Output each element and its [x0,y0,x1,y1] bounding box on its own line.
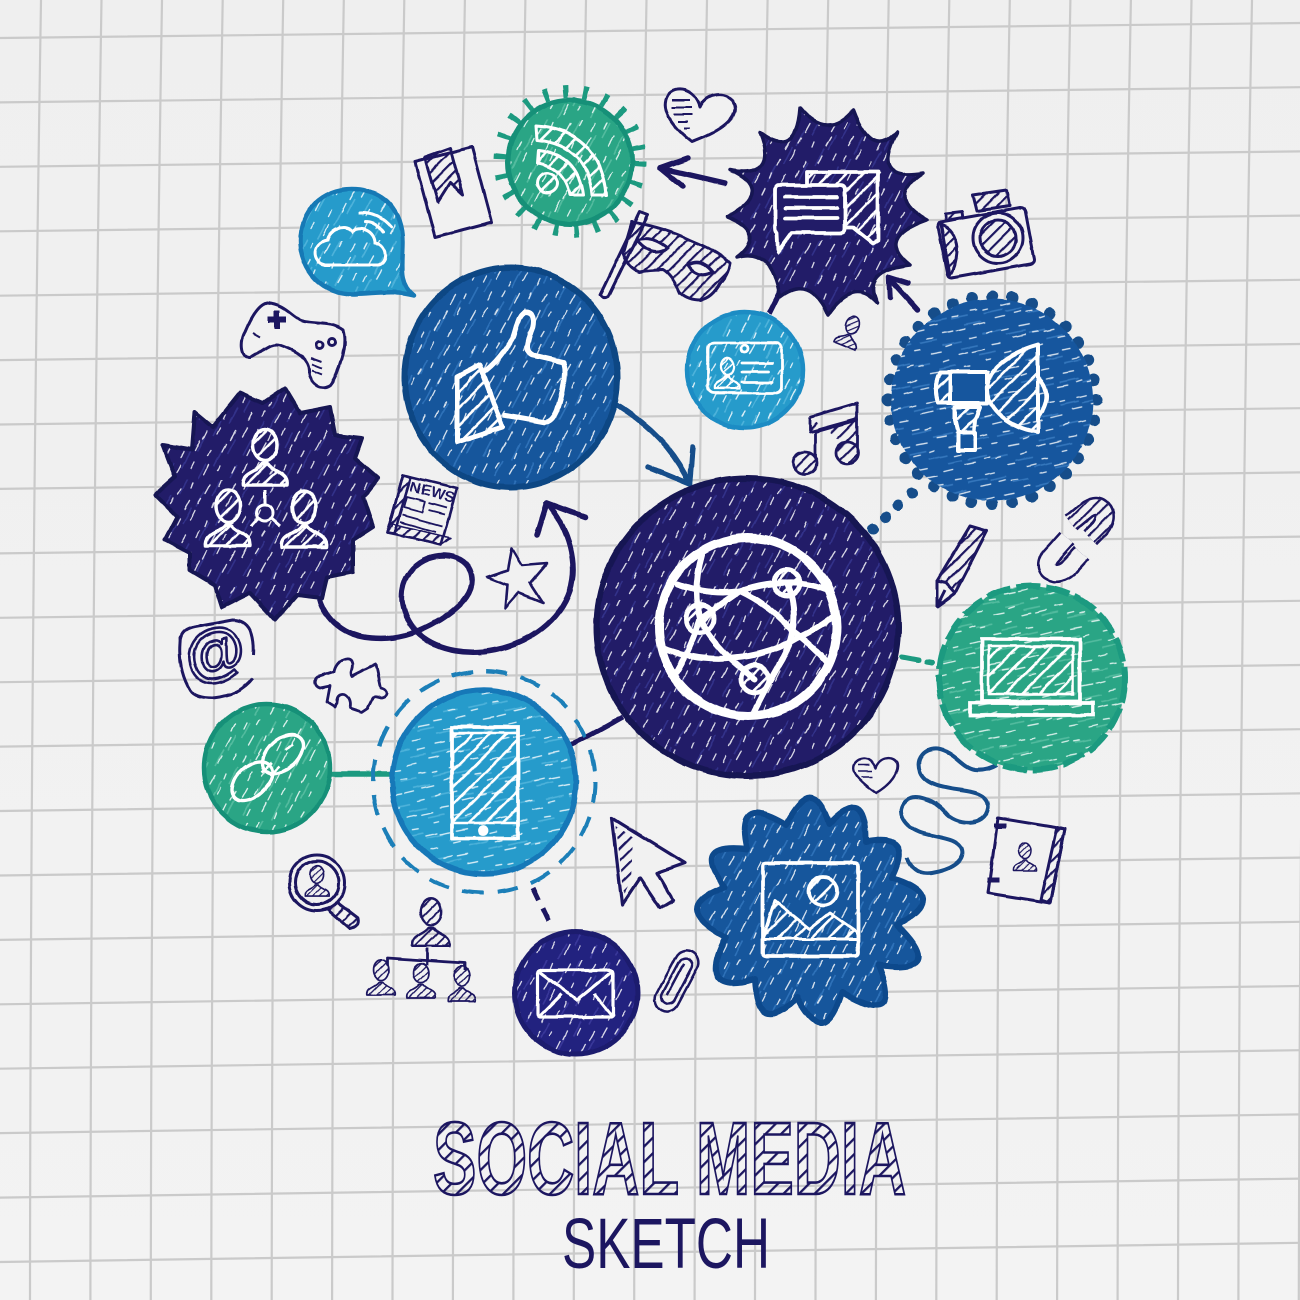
panel: laptop circle [939,586,1125,770]
connector: chain to phone [330,771,392,777]
panel: ID card circle [687,312,803,428]
panel: phone circle [373,671,595,893]
icon: game controller [242,303,344,387]
arrow: megaphone to speech burst [889,277,918,310]
panel: chain circle [204,704,330,832]
right link [1071,506,1105,538]
icon: person search [289,855,358,929]
icon: chain links [224,727,311,808]
icon: RSS [536,126,606,195]
icon: chat bubbles [775,172,878,252]
icon: newspaper: NEWS [408,478,457,507]
panel: speech burst [727,108,927,315]
icon: cursor arrow [612,818,685,908]
icon: cloud [316,213,391,265]
arrow: speech burst to RSS [660,158,725,187]
panel: mail circle [514,932,638,1054]
icon: connected people [206,429,326,547]
icon: bookmark [415,147,492,237]
panel: globe circle [596,478,898,776]
icon: newspaper [387,475,457,545]
dashed connector: phone to mail [533,888,552,928]
sketched diagram [155,89,1125,1055]
icon: camera [938,190,1034,278]
left link [1047,538,1082,573]
subtitle: SKETCH: SKETCH [562,1205,770,1284]
icon: small person [833,313,868,350]
panel: RSS badge [500,91,640,231]
panel: cloud bubble [300,189,414,295]
icon: globe network [659,538,837,716]
icon: carnival mask [600,212,730,300]
icon: picture [763,863,858,956]
arrow: thumbs up to globe [617,405,693,484]
icon: address book [987,818,1065,903]
connector: ID card to speech burst [769,288,782,314]
dashed connector: globe to laptop [902,657,932,663]
icon: laptop [970,639,1093,715]
icon: megaphone [936,345,1046,450]
icon: at sign: @ [177,612,252,693]
looped arrow: people to thumbs up [320,503,585,652]
title: SOCIAL MEDIA: SOCIAL MEDIA [433,1101,906,1216]
icon: music note [793,403,858,474]
squiggle: image gear to laptop [901,749,997,873]
panel: people burst [155,388,378,620]
icon: star [487,548,547,608]
icon: chain link outline [1047,506,1105,573]
panel: image gear [697,798,923,1023]
panel: thumbs up circle [404,268,618,488]
connector: phone to globe [570,717,623,745]
icon: heart top [665,89,735,142]
icon: thumbs up [457,312,564,442]
panel: megaphone circle [888,296,1096,504]
icon: small heart [853,758,898,793]
icon: paper clip [651,946,703,1016]
icon: puzzle piece [315,658,387,712]
icon: envelope [538,970,613,1017]
dotted connector: globe to megaphone [868,488,918,534]
icon: ID card [708,343,782,393]
icon: org chart [367,898,476,1001]
icon: pencil [937,526,987,606]
icon: smartphone [452,727,518,838]
